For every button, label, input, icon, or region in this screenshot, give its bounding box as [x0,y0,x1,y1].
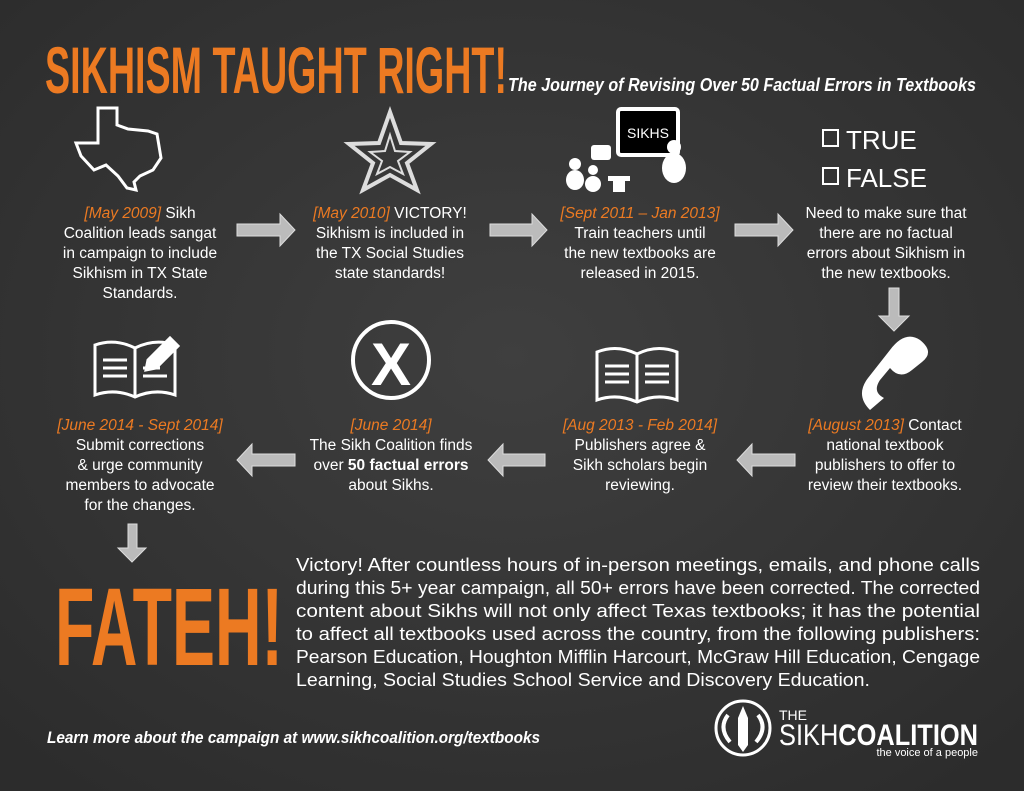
row 2 text: [June 2014 - Sept 2014] [56,417,223,434]
row 2 text: publishers to offer to [815,457,955,474]
row 2 text: The Sikh Coalition finds [310,437,473,454]
row 2 text: [June 2014] [349,417,432,434]
row 1 text: there are no factual [819,225,953,242]
subtitle: The Journey of Revising Over 50 Factual Errors in Textbooks [508,75,976,95]
row 2 text: Submit corrections [76,437,204,454]
logo: the voice of a people [876,747,978,759]
row 1 text: Sikhism is included in [316,225,464,242]
row 2 text: national textbook [826,437,944,454]
logo: THE [779,707,807,723]
icon: true false: FALSE [846,163,927,193]
row 2 text: [August 2013] Contact [807,417,962,434]
logo [716,701,978,759]
row 2 text: [Aug 2013 - Feb 2014] [562,417,718,434]
row 1 text: [May 2009] Sikh [83,205,196,222]
paragraph: during this 5+ year campaign, all 50+ errors have been corrected. The corrected [296,578,980,598]
footer link: Learn more about the campaign at www.sikhcoalition.org/textbooks [47,728,540,747]
row 2 text: review their textbooks. [808,477,962,494]
row 2 text: for the changes. [84,497,196,514]
row 1 text: the TX Social Studies [316,245,464,262]
paragraph: Learning, Social Studies School Service and Discovery Education. [296,670,870,690]
row 1 text: the new textbooks. [821,265,951,282]
row 1 text: [May 2010] VICTORY! [312,205,467,222]
row 1 text: in campaign to include [63,245,217,262]
row 1 text: Sikhism in TX State [73,265,207,282]
row 2 text: Sikh scholars begin [573,457,707,474]
title: SIKHISM TAUGHT RIGHT! [45,33,507,107]
icon: open book [597,348,677,402]
row 2 text: over 50 factual errors [313,457,469,474]
icon: book with pencil [95,338,178,397]
row 1 text: [Sept 2011 – Jan 2013] [559,205,720,222]
icon: X circle: X [371,331,411,398]
row 1 text: the new textbooks are [564,245,716,262]
logo: SIKHCOALITION [779,719,978,752]
row 2 text: reviewing. [605,477,675,494]
icon: phone [862,337,928,410]
row 1 text: Coalition leads sangat [64,225,217,242]
icon: classroom [566,109,686,192]
row 1 text: released in 2015. [581,265,699,282]
paragraph: content about Sikhs will not only affect Texas textbooks; it has the potential [296,601,980,621]
row 2 text: members to advocate [65,477,215,494]
icon: classroom: SIKHS [627,125,669,141]
paragraph [296,555,980,690]
icon: texas [76,108,161,190]
icon: X circle [353,322,429,398]
row 2 text: about Sikhs. [348,477,434,494]
paragraph: Pearson Education, Houghton Mifflin Harcourt, McGraw Hill Education, Cengage [296,647,980,667]
FATEH: FATEH! [55,566,283,689]
icon: true false: TRUE [846,125,917,155]
row 1 text: state standards! [335,265,445,282]
icon: true false [823,125,927,193]
icon: star [349,112,431,190]
row 1 text [63,205,967,302]
row 1 text: Need to make sure that [805,205,967,222]
row 2 text [56,417,962,514]
row 2 text: Publishers agree & [575,437,706,454]
paragraph: Victory! After countless hours of in-person meetings, emails, and phone calls [296,555,980,575]
row 1 text: Train teachers until [574,225,706,242]
paragraph: to affect all textbooks used across the country, from the following publishers: [296,624,980,644]
row 2 text: & urge community [78,457,203,474]
row 1 text: Standards. [103,285,177,302]
arrows [118,214,909,562]
row 1 text: errors about Sikhism in [807,245,965,262]
